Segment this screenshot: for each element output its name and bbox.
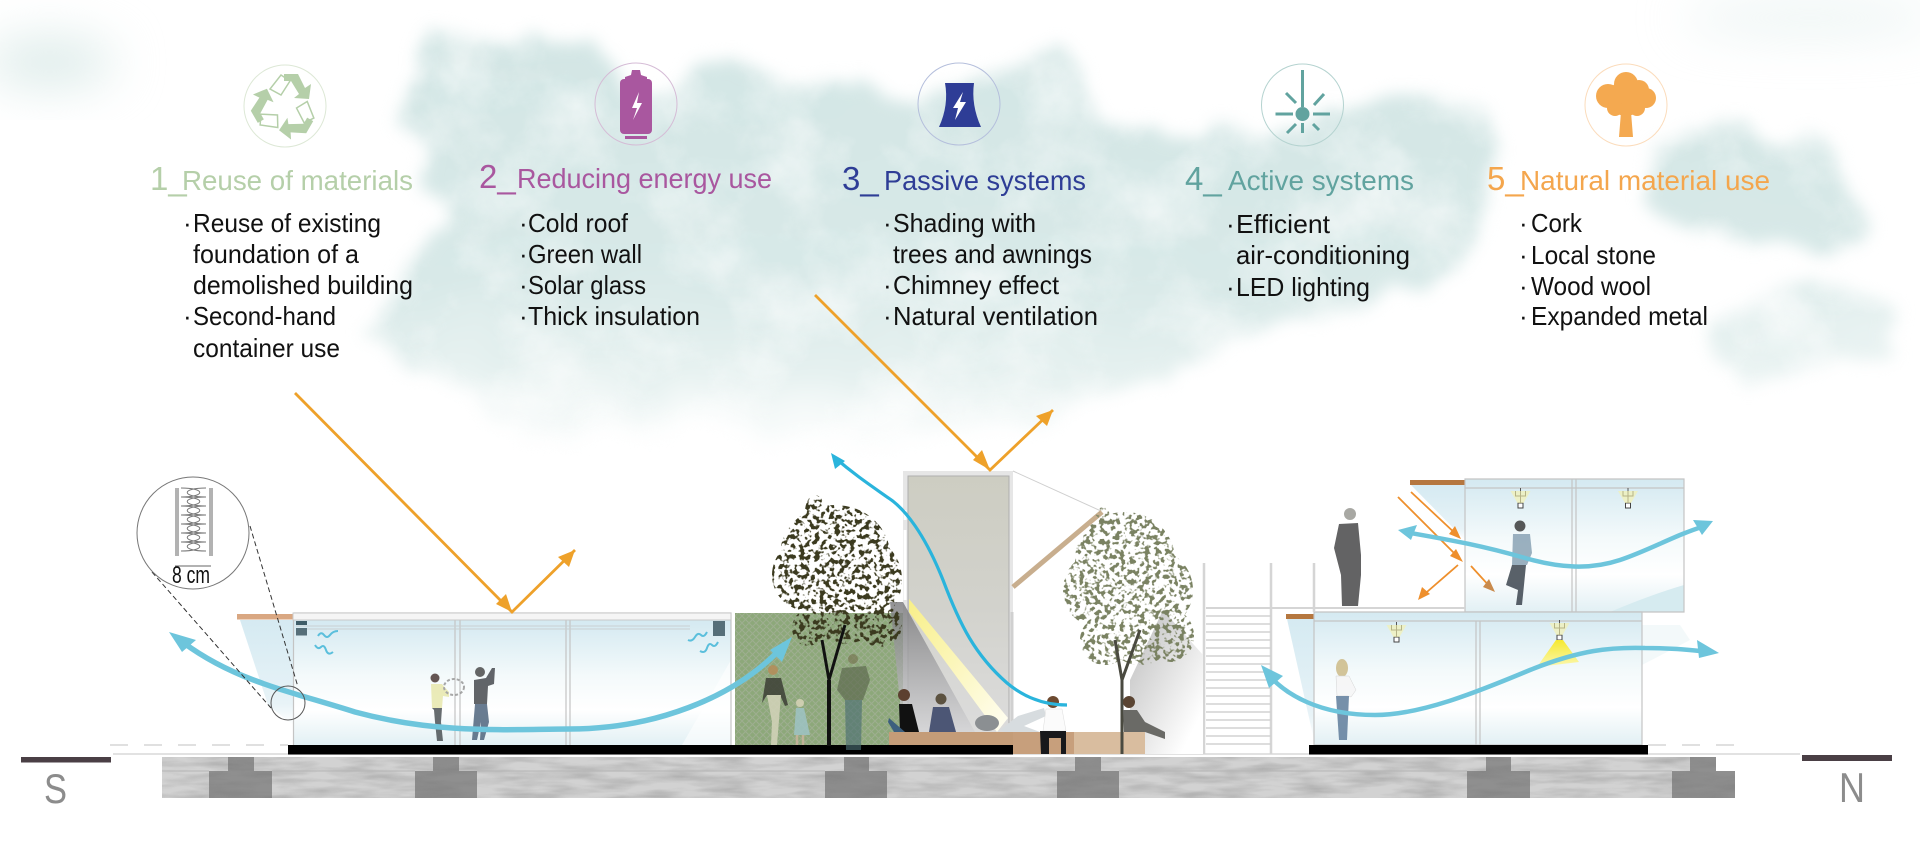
text block 5: · bbox=[1519, 271, 1528, 301]
text block 5: · bbox=[1519, 301, 1528, 331]
heading 5: 5_ bbox=[1487, 160, 1524, 197]
icon: cooling tower bbox=[918, 63, 1000, 145]
ground lines bbox=[110, 745, 1800, 754]
text block 1: Second-hand bbox=[193, 301, 336, 331]
blue airflow arrow upper right bbox=[1398, 520, 1713, 567]
text block 2: Solar glass bbox=[528, 270, 646, 300]
text block 1: Reuse of existing bbox=[193, 208, 381, 238]
heading 3: 3_ bbox=[842, 160, 879, 197]
person: woman in white bbox=[1336, 659, 1356, 740]
column 5: natural material use bbox=[1487, 64, 1770, 331]
person: woman in denim jacket bbox=[1506, 520, 1532, 605]
text block 4: · bbox=[1226, 272, 1235, 302]
text block 2: Green wall bbox=[528, 239, 642, 269]
compass: south: S bbox=[44, 765, 67, 812]
blue airflow arrow left bbox=[169, 632, 792, 730]
text block 3: Natural ventilation bbox=[893, 301, 1098, 331]
text block 1: · bbox=[183, 301, 192, 331]
text block 1 bbox=[183, 208, 413, 363]
text block 1: demolished building bbox=[193, 270, 413, 300]
heading 4: 4_ bbox=[1185, 160, 1222, 197]
heading 1: Reuse of materials bbox=[182, 165, 413, 196]
icon: recycling bbox=[244, 65, 326, 147]
person: man photographing bbox=[472, 667, 495, 740]
text block 2: Thick insulation bbox=[528, 301, 700, 331]
text block 1: foundation of a bbox=[193, 239, 360, 269]
awning strut bbox=[1013, 471, 1102, 587]
person: man with backpack bbox=[837, 654, 870, 750]
compass: south bbox=[21, 757, 111, 812]
icon: bouquet bbox=[444, 679, 464, 695]
text block 5: Cork bbox=[1531, 208, 1583, 238]
text block 2 bbox=[519, 208, 700, 331]
heading 5: Natural material use bbox=[1520, 165, 1770, 196]
icon: battery bbox=[595, 63, 677, 145]
callout: insulation detail: 8 cm bbox=[172, 562, 210, 589]
person: woman in yellow bbox=[430, 674, 449, 741]
text block 3: · bbox=[883, 270, 892, 300]
text block 1: · bbox=[183, 208, 192, 238]
text block 3: Shading with bbox=[893, 208, 1036, 238]
light cone bbox=[1537, 640, 1579, 667]
person: man in navy bbox=[929, 694, 956, 732]
eave and shadow bbox=[237, 614, 293, 725]
background clouds bbox=[0, 2, 1920, 440]
person: woman reading bbox=[1123, 696, 1165, 739]
icon: tree bbox=[1585, 64, 1667, 146]
person: man on roof bbox=[1334, 508, 1361, 606]
heading 2: 2_ bbox=[479, 158, 516, 195]
text block 3: trees and awnings bbox=[893, 239, 1092, 269]
text block 2: · bbox=[519, 270, 528, 300]
foundation bbox=[162, 757, 1735, 798]
orange sun arrow 2 bbox=[815, 295, 1053, 470]
people: green wall bbox=[762, 654, 870, 750]
tree 1 bbox=[772, 495, 902, 746]
person: reclining bbox=[975, 708, 1046, 732]
orange sun arrows at upper container bbox=[1398, 492, 1495, 600]
text block 3: · bbox=[883, 301, 892, 331]
text block 3: · bbox=[883, 208, 892, 238]
people: left container bbox=[430, 667, 495, 741]
person: man in white shirt bbox=[1040, 696, 1066, 754]
text block 5 bbox=[1519, 208, 1708, 331]
people: right containers bbox=[1334, 508, 1532, 740]
text block 5: Local stone bbox=[1531, 240, 1656, 270]
icon: warm air squiggles bbox=[315, 631, 718, 654]
blue airflow arrow chimney bbox=[831, 453, 1067, 705]
text block 4: · bbox=[1226, 209, 1235, 239]
chimney shadow bbox=[890, 602, 975, 732]
shadow behind second tree bbox=[1130, 610, 1203, 754]
column 1: reuse of materials bbox=[150, 65, 413, 363]
text block 2: Cold roof bbox=[528, 208, 629, 238]
column 2: reducing energy use bbox=[479, 63, 772, 331]
text block 4 bbox=[1226, 209, 1410, 302]
compass: north bbox=[1802, 755, 1892, 811]
blue airflow arrow lower right bbox=[1261, 640, 1719, 715]
text block 1: container use bbox=[193, 333, 340, 363]
heading 2: Reducing energy use bbox=[517, 163, 772, 194]
person: woman and child bbox=[762, 665, 810, 745]
orange sun arrow 1 bbox=[295, 393, 575, 612]
text block 3: Chimney effect bbox=[893, 270, 1060, 300]
heading 3: Passive systems bbox=[884, 165, 1086, 196]
text block 2: · bbox=[519, 301, 528, 331]
callout: insulation detail bbox=[137, 477, 305, 720]
stair bbox=[1204, 563, 1465, 754]
tree 2 bbox=[1063, 507, 1194, 754]
people: seated on benches bbox=[888, 689, 1165, 754]
insulation pattern bbox=[176, 488, 212, 556]
text block 4: LED lighting bbox=[1236, 272, 1370, 302]
text block 5: · bbox=[1519, 208, 1528, 238]
tower chimney bbox=[890, 471, 1102, 733]
text block 5: Wood wool bbox=[1531, 271, 1651, 301]
column 3: passive systems bbox=[842, 63, 1098, 331]
text block 2: · bbox=[519, 208, 528, 238]
person: woman in black bbox=[888, 689, 919, 732]
heading 4: Active systems bbox=[1228, 165, 1414, 196]
green wall bbox=[735, 613, 903, 746]
text block 5: Expanded metal bbox=[1531, 301, 1708, 331]
heading 1: 1_ bbox=[150, 160, 187, 197]
text block 5: · bbox=[1519, 240, 1528, 270]
column 4: active systems bbox=[1185, 64, 1414, 302]
icon: lamp bbox=[1262, 64, 1344, 146]
text block 4: Efficient bbox=[1236, 209, 1331, 239]
benches bbox=[889, 732, 1145, 754]
text block 2: · bbox=[519, 239, 528, 269]
lower right container bbox=[1286, 612, 1690, 754]
upper right container bbox=[1410, 479, 1684, 612]
left container bbox=[237, 613, 1013, 754]
text block 3 bbox=[883, 208, 1098, 331]
text block 4: air-conditioning bbox=[1236, 240, 1410, 270]
compass: north: N bbox=[1839, 764, 1865, 811]
sun beam bbox=[909, 599, 1008, 732]
